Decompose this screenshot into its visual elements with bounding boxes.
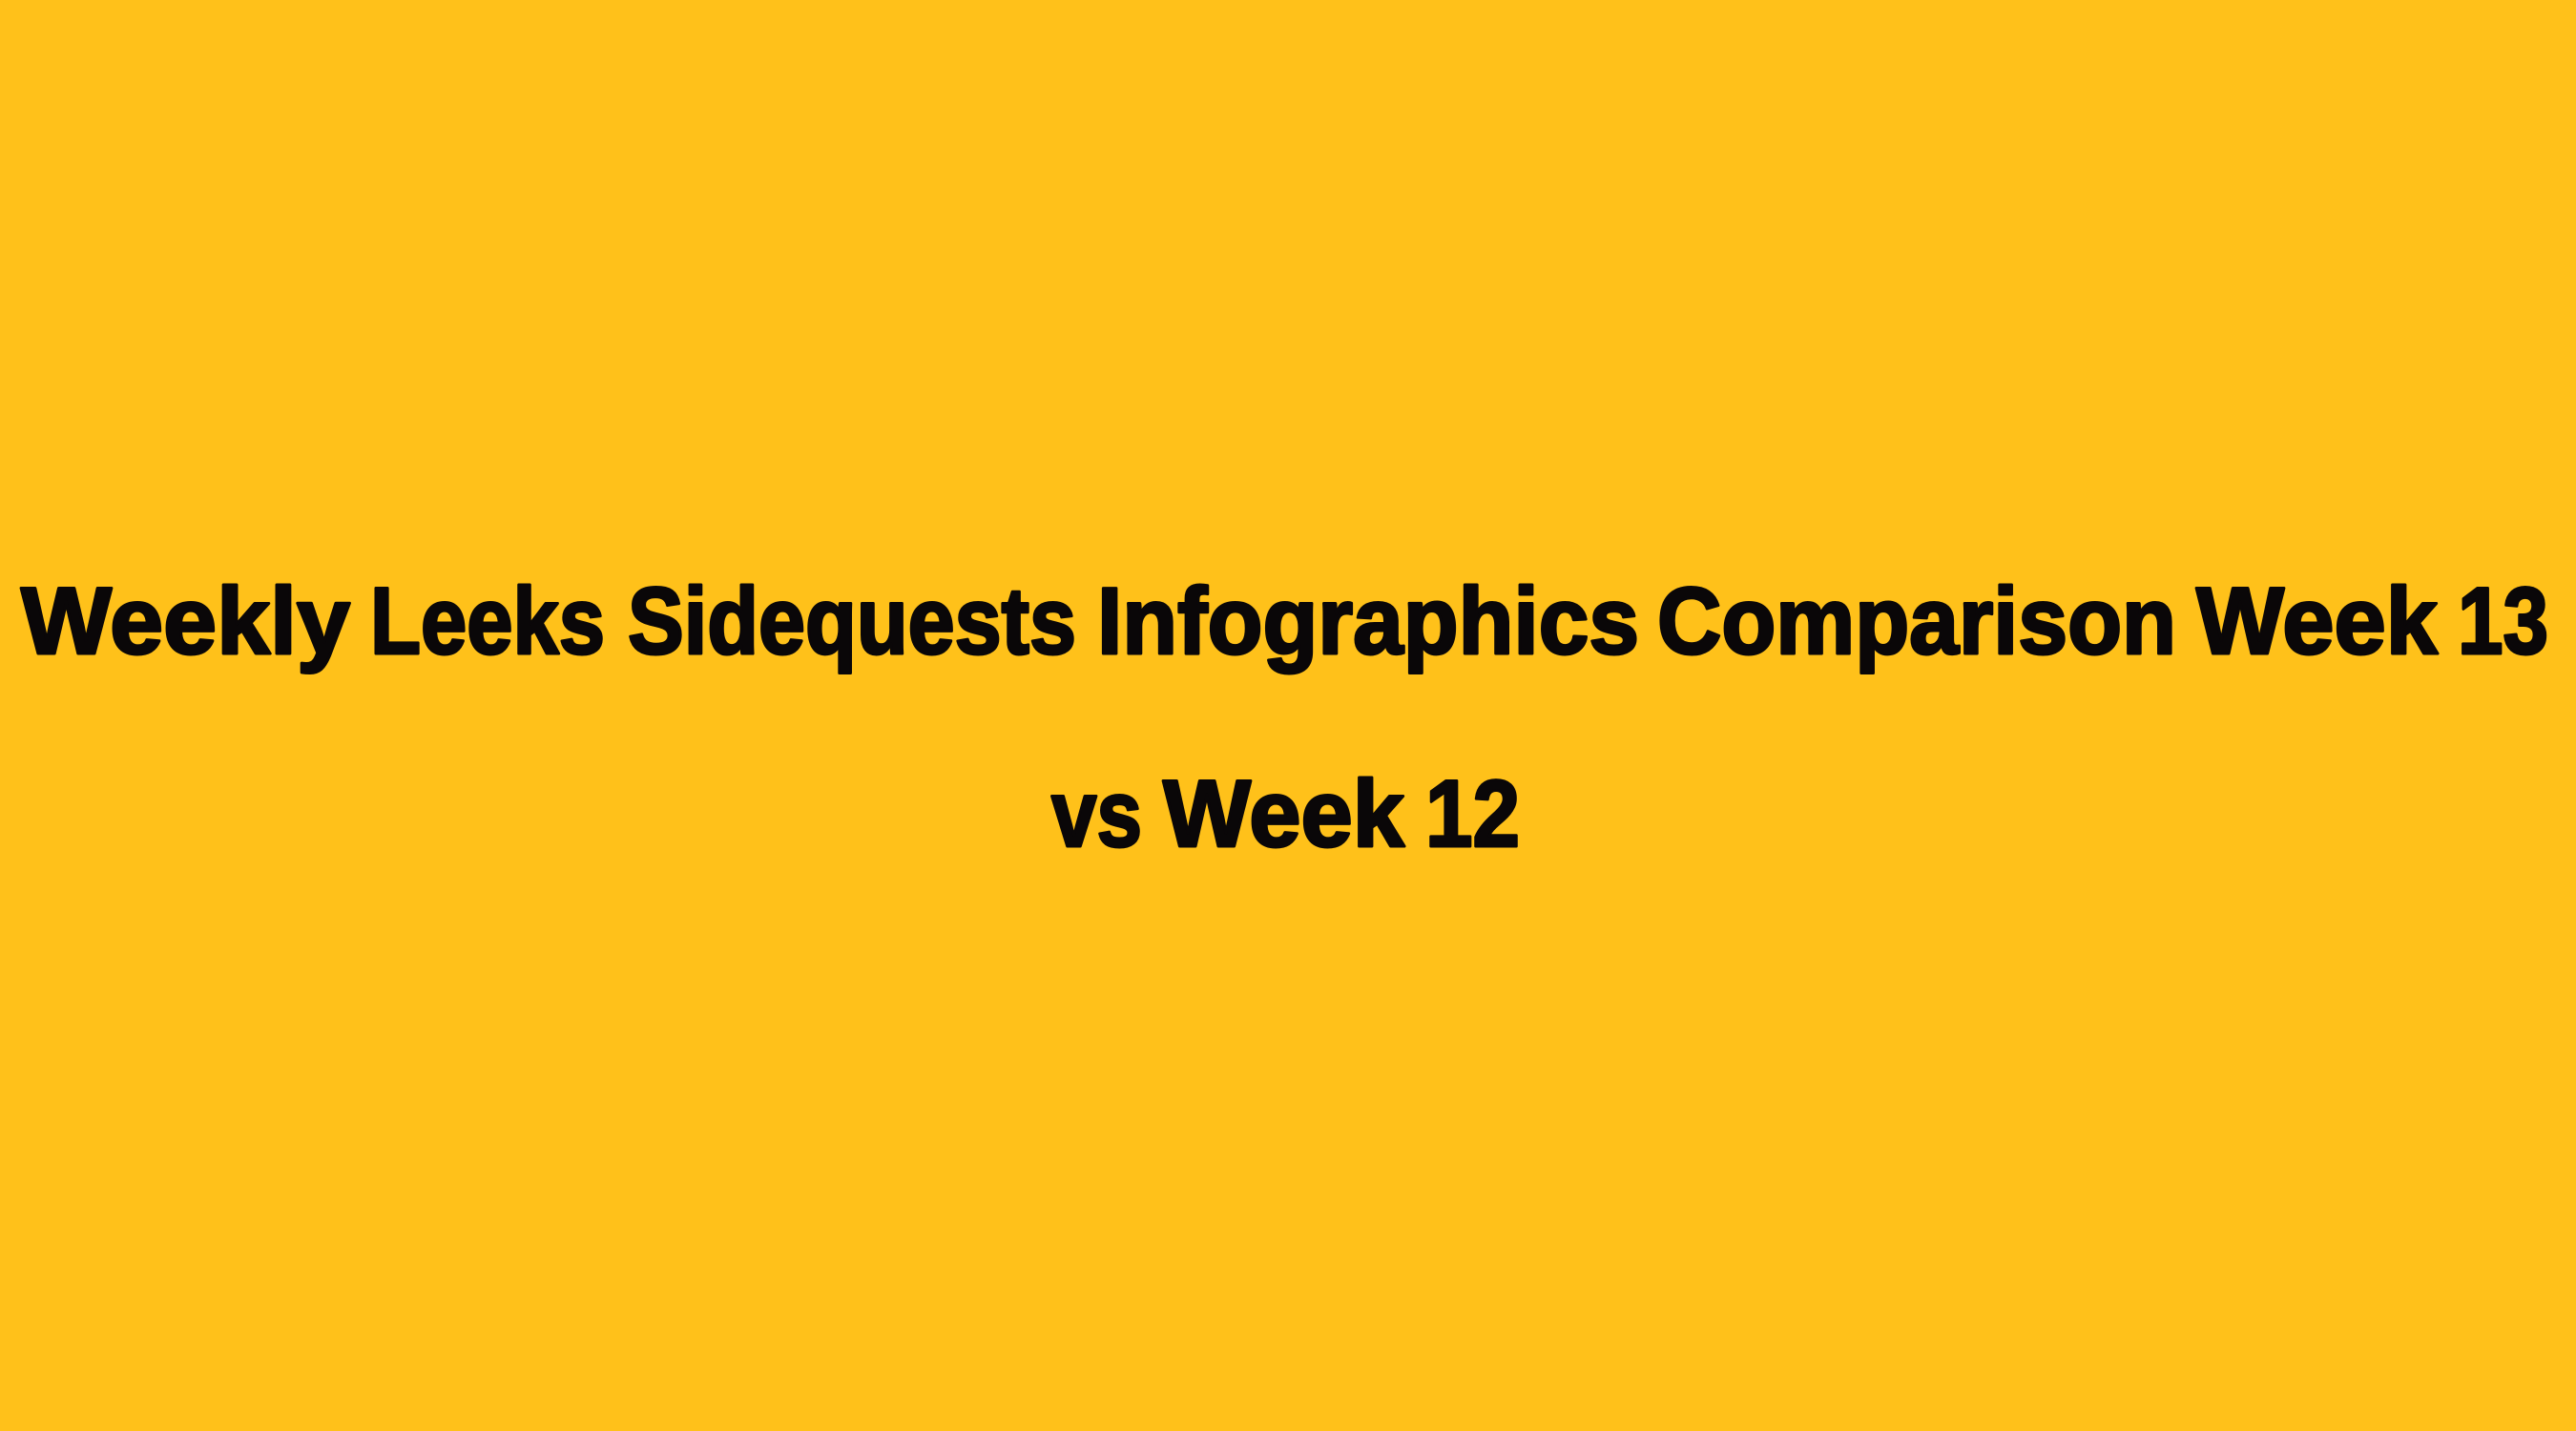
title line 1: Week: [2196, 568, 2439, 674]
title line 2: Week: [1163, 760, 1405, 866]
title line 1: 13: [2458, 568, 2548, 674]
title: [21, 568, 2548, 866]
title line 1: Leeks: [370, 568, 605, 674]
title line 1: Sidequests: [628, 568, 1076, 674]
title line 2: 12: [1425, 760, 1520, 866]
title line 2: [1051, 760, 1520, 866]
title line 2: vs: [1051, 760, 1142, 866]
title line 1: Infographics: [1097, 568, 1639, 674]
title line 1: Comparison: [1657, 568, 2176, 674]
title line 1: [21, 568, 2548, 674]
title line 1: Weekly: [21, 568, 350, 674]
